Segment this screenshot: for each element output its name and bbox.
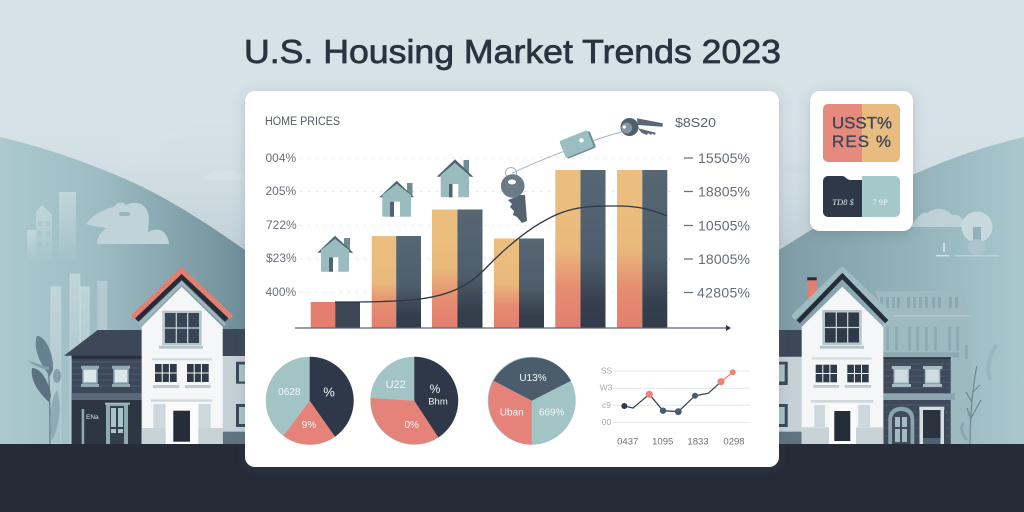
left axis labels: 004% (266, 151, 297, 165)
right axis labels: 15505% (698, 150, 750, 166)
dotted grid lines (300, 158, 675, 292)
line chart: W3 (600, 382, 613, 392)
pie chart 2 (370, 357, 458, 445)
chimney (807, 277, 817, 300)
stat block: navy and teal: 7 9P (872, 197, 888, 207)
pie chart 2: 0% (404, 420, 419, 431)
right background clouds (779, 163, 964, 227)
window (185, 364, 211, 388)
line chart: c9 (602, 400, 611, 410)
window (923, 366, 942, 387)
x axis arrow (295, 325, 731, 331)
stat block: navy and teal: TD8 $ (832, 197, 854, 207)
bar 3 (432, 210, 482, 328)
left axis labels: $23% (266, 251, 297, 265)
icon: key chain string (512, 131, 625, 173)
right axis labels: 18005% (698, 251, 750, 267)
door (919, 407, 944, 444)
window (845, 365, 871, 388)
bar 4 (494, 238, 544, 328)
window (112, 366, 130, 387)
left axis labels: 400% (266, 285, 297, 299)
window (81, 366, 99, 387)
trend curve (335, 206, 667, 302)
pie chart 1: 0628 (278, 387, 301, 398)
icon: right plant (962, 345, 997, 444)
house: white house right (795, 270, 890, 444)
house: grey house behind card right (779, 330, 802, 444)
bar 5 (555, 170, 606, 328)
stat block: coral and amber: USST% (832, 114, 892, 132)
right axis labels (684, 150, 750, 300)
stat block: coral and amber: RES % (832, 132, 891, 151)
right hill (779, 137, 1024, 450)
door (173, 411, 190, 442)
line chart: 1095 (652, 436, 673, 448)
left axis labels (266, 151, 297, 299)
stat block: navy and teal (823, 176, 900, 217)
pie chart 1 (266, 357, 354, 445)
faded cloud (86, 203, 169, 244)
house: dark house left: ENa (86, 414, 99, 421)
arched door (888, 407, 914, 444)
upper window (820, 310, 864, 349)
left hill (0, 137, 245, 450)
left axis labels: 205% (266, 184, 297, 198)
line chart: 00 (602, 417, 611, 427)
bar 2 (372, 236, 421, 328)
house: grey house behind card left (222, 329, 245, 444)
faded skyline lower left (51, 274, 107, 444)
bar 6 (617, 170, 667, 328)
panel: main chart card (245, 91, 779, 467)
pie chart 3: U13% (519, 373, 547, 384)
icon: top right key (620, 118, 663, 136)
line chart: 0298 (723, 436, 745, 448)
pie chart 2: % (430, 382, 441, 396)
house: faded back building right (876, 291, 972, 444)
right axis labels: 10505% (698, 218, 750, 234)
house: white house left (134, 270, 230, 444)
window (892, 366, 911, 387)
bar chart (311, 170, 667, 328)
window (813, 365, 839, 388)
right axis labels: 42805% (697, 284, 750, 300)
line chart: 1833 (687, 436, 709, 448)
line chart (600, 366, 750, 448)
pie chart 1: % (323, 384, 335, 400)
pie chart 2: Bhm (428, 396, 448, 408)
icon: house small (317, 236, 353, 272)
icon: left key (501, 168, 527, 223)
icon: faded round tree (936, 212, 999, 256)
panel: side stats card (810, 91, 913, 231)
line chart: 0437 (617, 436, 638, 448)
door (834, 411, 850, 441)
value label top right: $8S20 (675, 115, 716, 130)
bar 1 (311, 302, 360, 328)
house: small dark house right (883, 352, 959, 444)
icon: house large (437, 159, 473, 197)
pie chart 3 (488, 357, 576, 445)
stat block: coral and amber (823, 104, 900, 162)
house: dark house left (64, 330, 142, 444)
faded skyline top left (27, 192, 76, 260)
title: U.S. Housing Market Trends 2023 (244, 33, 781, 70)
door (105, 403, 130, 444)
heading: home prices: HOME PRICES (265, 116, 340, 128)
pie chart 3: 669% (539, 408, 565, 418)
background mist (0, 120, 1024, 450)
pie chart 1: 9% (302, 420, 316, 431)
icon: key tag (559, 129, 596, 159)
line chart: SS (601, 366, 612, 376)
window (153, 364, 179, 388)
right axis labels: 18805% (698, 184, 750, 200)
ground (0, 444, 1024, 512)
left background clouds (120, 111, 245, 180)
icon: house medium (379, 181, 414, 217)
pie chart 2: U22 (386, 379, 406, 391)
icon: left plant (28, 336, 61, 444)
pie chart 3: Uban (500, 408, 524, 418)
upper window (159, 311, 203, 349)
left axis labels: 722% (266, 218, 297, 232)
